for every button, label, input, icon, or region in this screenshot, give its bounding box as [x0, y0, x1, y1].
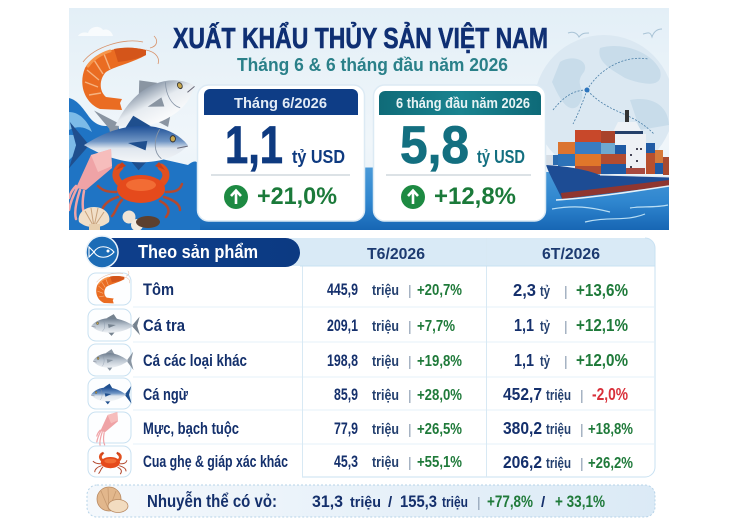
row: Cá tra: +7,7% — [417, 318, 455, 335]
row: Cá các loại khác: | — [408, 353, 412, 369]
row: Mực, bạch tuộc: Mực, bạch tuộc — [143, 419, 239, 438]
row: Mực, bạch tuộc: | — [408, 421, 412, 437]
row: Tôm — [88, 271, 628, 305]
row: Cá tra — [88, 309, 628, 341]
row: Cá ngừ: | — [408, 387, 412, 403]
row: Mực, bạch tuộc: +18,8% — [588, 421, 633, 438]
row: Tôm: tỷ — [540, 284, 550, 300]
row: Cá ngừ: Cá ngừ — [143, 385, 189, 404]
row: Cá ngừ: +28,0% — [417, 387, 462, 404]
row: Cua ghẹ & giáp xác khác: +55,1% — [417, 454, 462, 471]
row: Cá ngừ: | — [580, 387, 584, 403]
row: Cá tra: | — [564, 318, 568, 334]
column heading: T6/2026 — [367, 246, 425, 263]
row: Cá tra: | — [408, 318, 412, 334]
row: Mực, bạch tuộc — [88, 412, 633, 446]
values: / — [541, 494, 546, 511]
row: Cua ghẹ & giáp xác khác — [88, 446, 633, 477]
values: | — [477, 494, 481, 510]
row: Mực, bạch tuộc: +26,5% — [417, 421, 462, 438]
icon: squid — [69, 149, 112, 219]
row: Cá các loại khác: 198,8 — [327, 352, 358, 370]
row: Cua ghẹ & giáp xác khác: 45,3 — [334, 453, 358, 471]
icon: shells — [79, 207, 160, 231]
row: Tôm: 2,3 — [513, 280, 536, 300]
value: 1,1 — [225, 116, 283, 175]
card header — [204, 89, 358, 115]
row: Mực, bạch tuộc: triệu — [546, 422, 571, 438]
row: Tôm: triệu — [372, 283, 399, 299]
row: Cá tra: triệu — [372, 319, 399, 335]
row: Tôm: Tôm — [143, 280, 174, 299]
icon: fish top — [94, 80, 195, 132]
row: Cua ghẹ & giáp xác khác: Cua ghẹ & giáp xác khác — [143, 452, 288, 471]
row: Cá các loại khác: triệu — [372, 354, 399, 370]
globe with shipping routes — [534, 35, 674, 175]
row: Cá ngừ: 452,7 — [503, 384, 542, 404]
values: triệu — [350, 494, 381, 511]
panel: six months card — [374, 85, 546, 221]
row: Tôm: 445,9 — [327, 281, 358, 299]
icon: crab — [98, 162, 182, 217]
card header — [379, 91, 541, 115]
row: Cá các loại khác: +12,0% — [576, 350, 628, 370]
unit: tỷ USD — [292, 147, 345, 167]
values — [312, 492, 605, 511]
values: 155,3 — [400, 492, 437, 511]
title: XUẤT KHẨU THỦY SẢN VIỆT NAM — [173, 21, 548, 55]
row: Tôm: +20,7% — [417, 282, 462, 299]
values: + 33,1% — [555, 492, 605, 511]
icon: clam shells — [97, 487, 128, 512]
row: Cua ghẹ & giáp xác khác: triệu — [546, 456, 571, 472]
column heading: 6T/2026 — [542, 246, 600, 263]
value: 5,8 — [400, 116, 469, 175]
row: Tôm: | — [408, 282, 412, 298]
row: Cua ghẹ & giáp xác khác: +26,2% — [588, 455, 633, 472]
values: triệu — [442, 494, 468, 511]
header banner — [69, 8, 674, 231]
row: Mực, bạch tuộc: | — [580, 421, 584, 437]
row: Cua ghẹ & giáp xác khác: | — [408, 454, 412, 470]
card label: 6 tháng đầu năm 2026 — [396, 95, 530, 112]
row: Cá các loại khác: tỷ — [540, 354, 550, 370]
label: Nhuyễn thể có vỏ: — [147, 490, 277, 511]
row: Cá các loại khác: Cá các loại khác — [143, 351, 247, 370]
panel: molluscs strip — [87, 485, 655, 517]
row: Cá ngừ: 85,9 — [334, 386, 358, 404]
values: +77,8% — [487, 493, 533, 511]
row: Cá các loại khác — [88, 344, 628, 376]
row: Cá các loại khác: +19,8% — [417, 353, 462, 370]
card label: Tháng 6/2026 — [234, 95, 327, 112]
heading pill: Theo sản phẩm — [138, 242, 258, 262]
row: Cá ngừ: triệu — [372, 388, 399, 404]
row: Cá tra: Cá tra — [143, 316, 185, 335]
row: Cá các loại khác: 1,1 — [514, 350, 534, 370]
panel: June 2026 card — [198, 85, 364, 221]
row: Mực, bạch tuộc: 380,2 — [503, 418, 542, 438]
icon: seagulls — [568, 29, 662, 37]
icon: up arrow — [401, 185, 425, 209]
unit: tỷ USD — [477, 147, 525, 167]
panel: product table — [86, 236, 655, 477]
subtitle: Tháng 6 & 6 tháng đầu năm 2026 — [237, 55, 508, 75]
row: Cá các loại khác: | — [564, 353, 568, 369]
values: / — [388, 494, 393, 511]
row: Cá tra: 1,1 — [514, 315, 534, 335]
icon: up arrow — [224, 185, 248, 209]
cargo ship — [546, 110, 669, 200]
row: Mực, bạch tuộc: 77,9 — [334, 420, 358, 438]
icon: tuna — [69, 116, 188, 170]
row: Cá ngừ: -2,0% — [592, 384, 628, 404]
icon: fish badge — [86, 236, 118, 268]
row: Mực, bạch tuộc: triệu — [372, 422, 399, 438]
values: 31,3 — [312, 492, 343, 511]
waves left — [69, 98, 200, 230]
row: Cua ghẹ & giáp xác khác: triệu — [372, 455, 399, 471]
row: Cá ngừ: triệu — [546, 388, 571, 404]
row: Cá tra: 209,1 — [327, 317, 358, 335]
row: Cá ngừ — [88, 378, 628, 409]
row: Cá tra: +12,1% — [576, 315, 628, 335]
sea — [200, 168, 669, 230]
heading pill — [86, 236, 300, 268]
icon: shrimp — [82, 36, 158, 110]
growth: +21,0% — [257, 183, 337, 210]
row: Cua ghẹ & giáp xác khác: 206,2 — [503, 452, 542, 472]
icon: cloud — [78, 27, 113, 36]
growth: +12,8% — [434, 183, 516, 210]
row: Tôm: +13,6% — [576, 280, 628, 300]
row: Cua ghẹ & giáp xác khác: | — [580, 455, 584, 471]
row: Cá tra: tỷ — [540, 319, 550, 335]
sea highlights — [552, 205, 668, 222]
row: Tôm: | — [564, 283, 568, 299]
